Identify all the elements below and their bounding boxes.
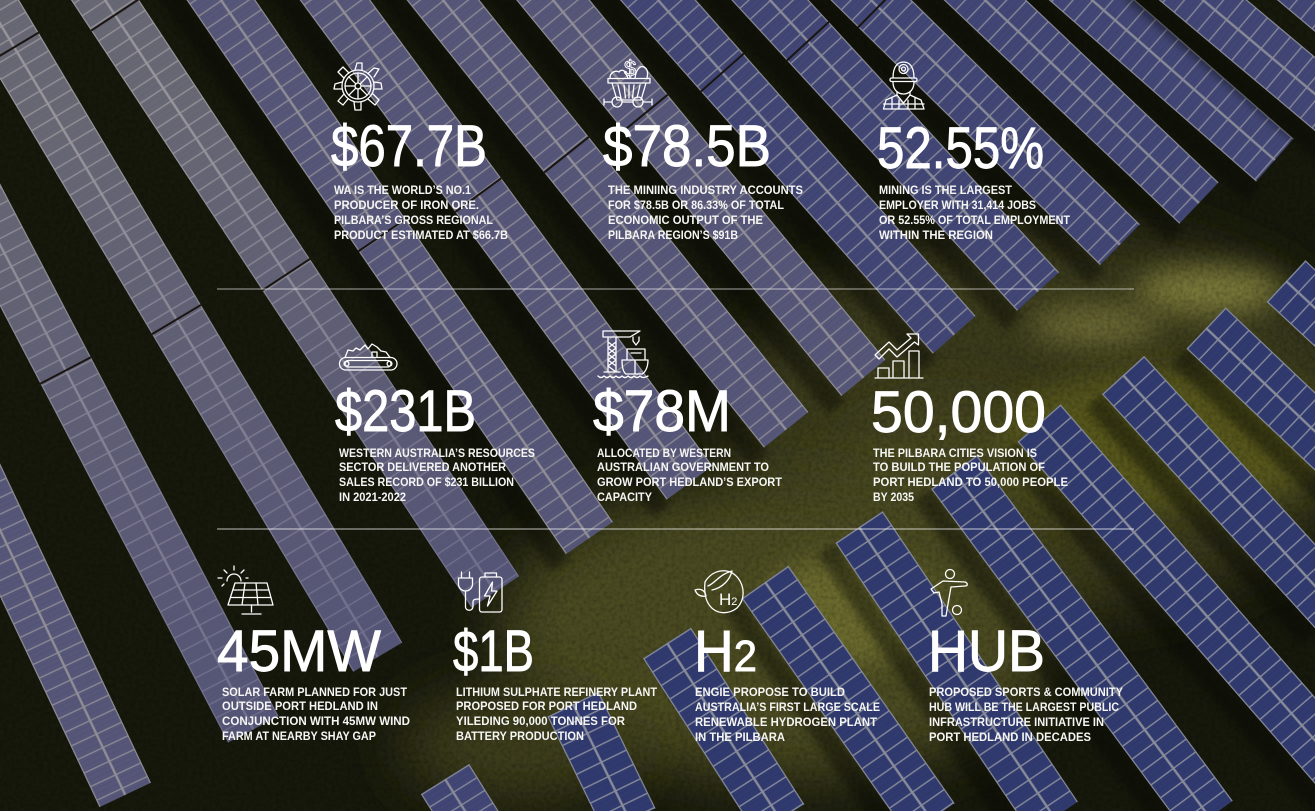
description text xyxy=(879,183,1071,242)
description text: PRODUCER OF IRON ORE. xyxy=(334,198,479,212)
description text: GROW PORT HEDLAND’S EXPORT xyxy=(597,475,783,489)
description text xyxy=(334,183,508,242)
big number: HUB: HUB xyxy=(928,619,1045,684)
description text: SECTOR DELIVERED ANOTHER xyxy=(339,460,506,474)
description text: PROPOSED SPORTS & COMMUNITY xyxy=(929,685,1123,699)
description text: SALES RECORD OF $231 BILLION xyxy=(339,475,514,489)
icon: hydrogen circle with leaves xyxy=(695,571,743,613)
panel: mining industry output xyxy=(603,56,803,242)
icon: mine cart with dollar xyxy=(604,56,652,107)
description text: SOLAR FARM PLANNED FOR JUST xyxy=(222,685,408,699)
description text: FARM AT NEARBY SHAY GAP xyxy=(222,729,376,743)
description text: AUSTRALIA’S FIRST LARGE SCALE xyxy=(695,700,880,714)
description text: ENGIE PROPOSE TO BUILD xyxy=(695,685,845,699)
description text: FOR $78.5B OR 86.33% OF TOTAL xyxy=(608,198,784,212)
description text: MINING IS THE LARGEST xyxy=(879,183,1013,197)
description text xyxy=(873,446,1068,504)
description text xyxy=(222,685,410,743)
big number: $67.7B: $67.7B xyxy=(331,114,487,179)
description text: PORT HEDLAND TO 50,000 PEOPLE xyxy=(873,475,1068,489)
icon: solar panel with sun xyxy=(218,566,273,614)
panel: lithium refinery xyxy=(453,572,658,743)
description text: BATTERY PRODUCTION xyxy=(456,729,584,743)
description text: YILEDING 90,000 TONNES FOR xyxy=(456,714,625,728)
description text: WESTERN AUSTRALIA’S RESOURCES xyxy=(339,446,535,460)
description text: PRODUCT ESTIMATED AT $66.7B xyxy=(334,228,508,242)
divider line: row two and three xyxy=(217,528,1134,530)
icon: rising bar chart with arrow xyxy=(875,334,923,378)
panel: resources sector sales xyxy=(335,344,535,504)
panel: mining employment xyxy=(877,62,1071,242)
panel: sports and community hub xyxy=(928,570,1123,744)
description text: OR 52.55% OF TOTAL EMPLOYMENT xyxy=(879,213,1071,227)
icon: conveyor belt with ore xyxy=(340,344,397,370)
icon: plug and battery with bolt xyxy=(458,572,502,612)
icon: hydrogen circle with leaves: H2 xyxy=(719,590,737,609)
description text xyxy=(608,183,803,242)
icon: miner with helmet lamp xyxy=(884,62,924,109)
description text xyxy=(695,685,880,744)
icon: person kicking football xyxy=(931,570,967,616)
panel: iron ore gross regional product xyxy=(331,63,508,242)
description text: CONJUNCTION WITH 45MW WIND xyxy=(222,714,410,728)
description text: RENEWABLE HYDROGEN PLANT xyxy=(695,715,878,729)
panel: port hedland export capacity xyxy=(593,331,783,504)
panel: pilbara cities population xyxy=(871,334,1068,504)
description text: OUTSIDE PORT HEDLAND IN xyxy=(222,699,378,713)
description text: EMPLOYER WITH 31,414 JOBS xyxy=(879,198,1036,212)
description text: INFRASTRUCTURE INITIATIVE IN xyxy=(929,715,1104,729)
panel: solar farm xyxy=(217,566,410,743)
big number: $78M: $78M xyxy=(593,379,731,444)
description text: AUSTRALIAN GOVERNMENT TO xyxy=(597,460,769,474)
description text xyxy=(929,685,1123,744)
big number: $1B: $1B xyxy=(453,619,534,684)
big number: H2: H2 xyxy=(694,619,757,684)
description text: THE MINIING INDUSTRY ACCOUNTS xyxy=(608,183,803,197)
icon: ship wheel xyxy=(334,63,382,110)
description text: PILBARA REGION’S $91B xyxy=(608,228,738,242)
description text: ALLOCATED BY WESTERN xyxy=(597,446,731,460)
description text: CAPACITY xyxy=(597,490,652,504)
description text: IN THE PILBARA xyxy=(695,730,785,744)
description text: WITHIN THE REGION xyxy=(879,228,993,242)
big number: 50,000: 50,000 xyxy=(871,380,1046,445)
big number: $78.5B: $78.5B xyxy=(603,114,771,179)
description text: ECONOMIC OUTPUT OF THE xyxy=(608,213,763,227)
description text xyxy=(597,446,783,504)
description text: TO BUILD THE POPULATION OF xyxy=(873,460,1045,474)
description text: HUB WILL BE THE LARGEST PUBLIC xyxy=(929,700,1119,714)
description text: PILBARA’S GROSS REGIONAL xyxy=(334,213,493,227)
divider line: row one and two xyxy=(217,288,1134,290)
big number: $231B: $231B xyxy=(335,379,476,444)
description text: LITHIUM SULPHATE REFINERY PLANT xyxy=(456,685,658,699)
description text: PROPOSED FOR PORT HEDLAND xyxy=(456,699,637,713)
big number: 52.55%: 52.55% xyxy=(877,116,1044,181)
description text: PORT HEDLAND IN DECADES xyxy=(929,730,1091,744)
icon: port crane and ship xyxy=(598,331,648,378)
description text xyxy=(456,685,658,743)
description text: BY 2035 xyxy=(873,490,914,504)
description text: THE PILBARA CITIES VISION IS xyxy=(873,446,1037,460)
icon: mine cart with dollar: $ xyxy=(624,56,636,81)
description text xyxy=(339,446,535,504)
panel: renewable hydrogen xyxy=(694,571,880,744)
description text: IN 2021-2022 xyxy=(339,490,406,504)
description text: WA IS THE WORLD’S NO.1 xyxy=(334,183,471,197)
big number: 45MW: 45MW xyxy=(217,619,381,684)
